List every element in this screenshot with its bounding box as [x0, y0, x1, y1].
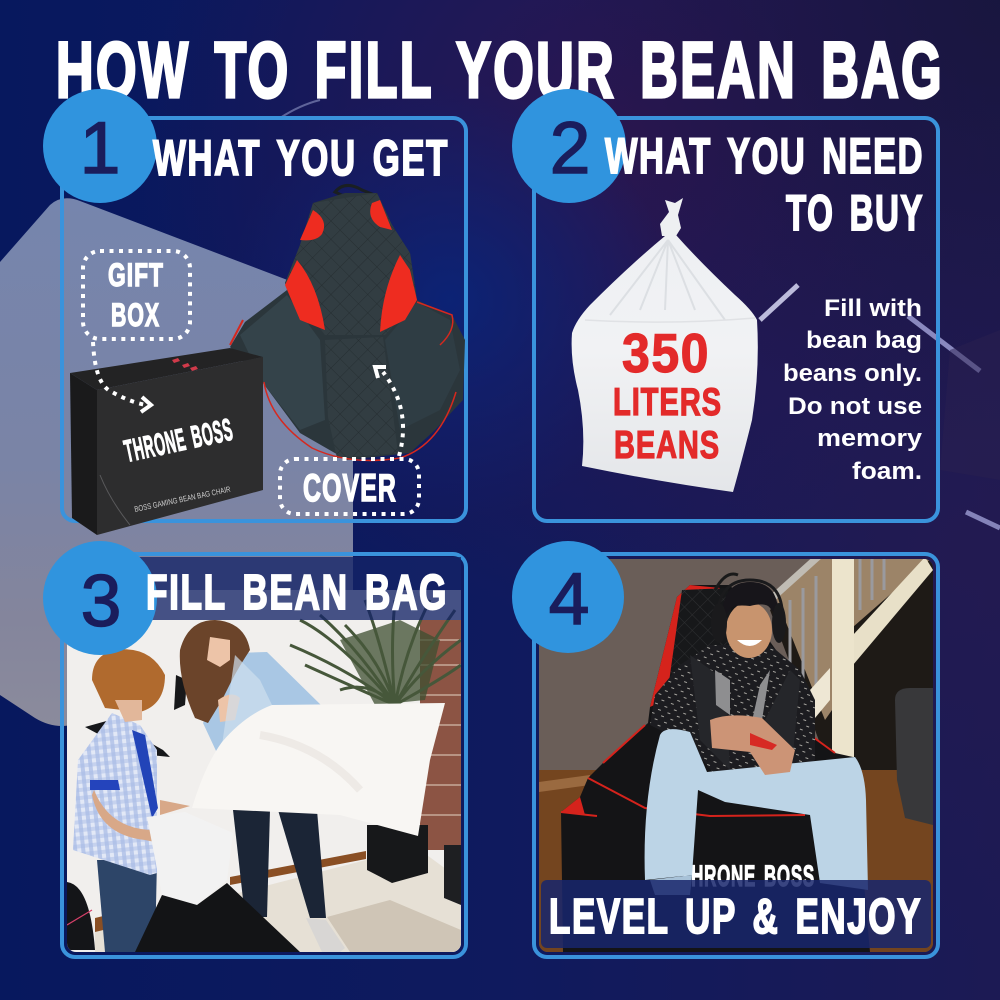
instruction text: foam. — [852, 458, 922, 485]
heading: what you get: WHAT YOU GET — [153, 130, 449, 186]
gift box product: THRONE BOSS — [121, 412, 236, 469]
panel 2: what you need to buy — [512, 89, 938, 521]
box subtitle: BOSS GAMING BEAN BAG CHAIR — [134, 485, 231, 514]
sack label — [613, 322, 722, 467]
photo: filling the bean bag — [67, 590, 461, 952]
instruction text: bean bag — [806, 327, 922, 354]
number badge 4: 4 — [549, 559, 589, 640]
sack label: BEANS — [614, 424, 720, 467]
heading: what you need to buy: TO BUY — [786, 185, 924, 241]
callout: gift box: BOX — [111, 297, 160, 333]
bean bag chair — [561, 574, 870, 952]
instruction text: Fill with — [824, 295, 922, 322]
cover product image — [230, 185, 465, 460]
heading band — [100, 557, 461, 620]
caption band — [541, 880, 931, 948]
chair logo: THRONE BOSS — [680, 860, 815, 893]
callout: gift box: GIFT — [108, 257, 164, 293]
panel 4: level up and enjoy — [512, 541, 938, 957]
person: teen gaming — [645, 580, 868, 895]
number badge 1: 1 — [80, 108, 120, 189]
panel 1: what you get — [43, 89, 466, 535]
panel 3: fill bean bag — [43, 541, 466, 957]
person: boy — [73, 649, 190, 952]
callout: cover — [280, 459, 419, 514]
heading: fill bean bag: FILL BEAN BAG — [146, 566, 448, 620]
number badge 2 — [512, 89, 626, 203]
arrow: gift box to box — [93, 342, 151, 412]
heading: what you need to buy — [605, 128, 924, 241]
number badge 4 — [512, 541, 624, 653]
bean sack image — [572, 198, 758, 492]
gift box product — [70, 348, 263, 535]
translucent background shape — [0, 198, 353, 726]
instruction text: memory — [817, 425, 923, 452]
number badge 2: 2 — [550, 108, 590, 189]
photo: teen on bean bag — [539, 555, 933, 952]
number badge 3 — [43, 541, 157, 655]
number badge 1 — [43, 89, 157, 203]
callout: gift box — [83, 251, 190, 339]
instruction text: beans only. — [783, 360, 922, 387]
instruction text: Do not use — [788, 393, 922, 420]
number badge 3: 3 — [81, 561, 121, 642]
sack label: 350 — [622, 322, 710, 384]
bean bag inner and black cover — [135, 812, 300, 952]
arrow: cover label to cover — [375, 367, 403, 456]
person: woman — [180, 620, 345, 952]
instruction text — [783, 295, 923, 485]
sack label: LITERS — [613, 381, 722, 424]
callout: cover: COVER — [303, 467, 397, 510]
plastic bean bag being poured — [192, 655, 445, 836]
